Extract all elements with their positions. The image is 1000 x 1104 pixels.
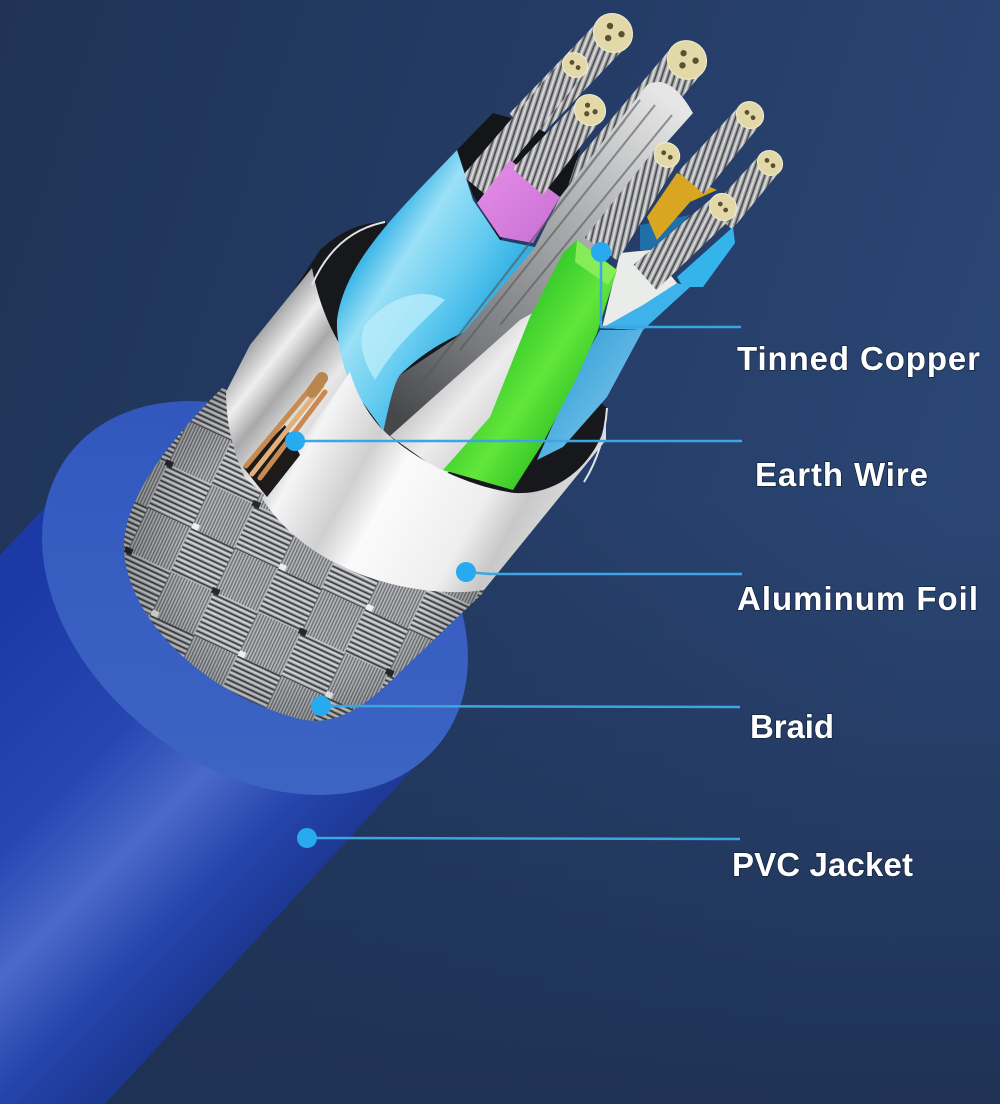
cyan jacket highlight (362, 294, 445, 380)
leader: tinned copper (591, 242, 741, 327)
wire: pink core (513, 86, 615, 195)
braid shield (124, 388, 484, 721)
wire: top rear (509, 5, 641, 141)
wire: green core, tinned copper (585, 134, 690, 261)
leader: braid (311, 696, 740, 716)
green wire end face (575, 240, 617, 285)
drain strand lines (405, 100, 672, 405)
pink insulation (477, 160, 560, 243)
strand wires (337, 5, 789, 436)
label: Tinned Copper: Tinned Copper (737, 340, 980, 377)
PVC jacket tube (0, 460, 435, 1104)
large white cable (390, 295, 565, 475)
right blue translucent cable (537, 330, 643, 460)
cyan jacket pair (337, 150, 535, 433)
leader: aluminum foil (456, 562, 742, 582)
foil inner wall (226, 268, 356, 498)
wire: top front left (463, 46, 594, 195)
yellow insulation (647, 173, 717, 240)
blue jacket tip right (677, 227, 735, 287)
white insulated wire (602, 250, 677, 330)
leader: earth wire (285, 431, 742, 451)
wire: black insulation backing (457, 113, 580, 240)
foil outer front (262, 372, 606, 592)
label: Aluminum Foil: Aluminum Foil (737, 580, 978, 617)
blue band beside white wire (602, 283, 690, 330)
earth wire pocket (243, 425, 300, 497)
wire: yellow core (678, 94, 771, 194)
green wire (443, 240, 617, 490)
earth wire (246, 378, 325, 478)
label: PVC Jacket: PVC Jacket (732, 846, 913, 883)
foil rim highlight (312, 222, 607, 482)
label: Braid: Braid (750, 708, 834, 745)
wire: white core (634, 186, 744, 290)
wire: top right rear (562, 33, 715, 203)
wire: far right (709, 144, 789, 229)
leader: PVC jacket (297, 828, 740, 848)
jacket end disc (0, 320, 545, 876)
foil inner cavity (225, 222, 607, 497)
wire: large drain bundle (383, 82, 693, 436)
dark blue gap (640, 215, 690, 250)
label: Earth Wire: Earth Wire (755, 456, 928, 493)
